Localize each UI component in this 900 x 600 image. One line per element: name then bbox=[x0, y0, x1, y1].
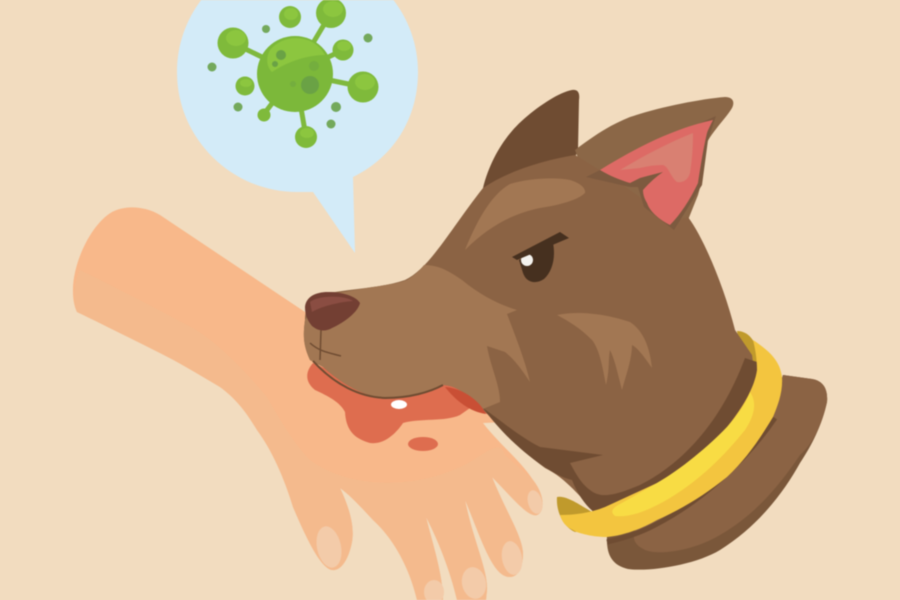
virus body bbox=[257, 36, 333, 112]
nail: index finger bbox=[424, 580, 444, 600]
ear inner outline bbox=[586, 116, 716, 230]
virus spikes bbox=[233, 13, 363, 137]
wound spot bbox=[408, 437, 438, 451]
nail: middle finger bbox=[459, 565, 489, 600]
nail: little finger bbox=[525, 489, 545, 515]
collar inside bottom bbox=[557, 497, 610, 532]
ear inner highlight bbox=[620, 133, 693, 182]
shadow under collar bbox=[607, 418, 775, 542]
far ear bbox=[483, 90, 579, 188]
virus balls bbox=[218, 0, 378, 148]
nail: ring finger bbox=[499, 540, 525, 576]
blood wound bbox=[307, 363, 490, 451]
dog bbox=[304, 90, 827, 570]
virus ball highlights bbox=[226, 1, 375, 138]
forearm lower shade bbox=[74, 270, 543, 600]
forehead light patch bbox=[465, 178, 585, 250]
eye highlight bbox=[521, 254, 533, 266]
nose bbox=[305, 292, 360, 330]
head bbox=[304, 155, 757, 515]
cheek fur bbox=[557, 313, 652, 390]
body lighter area bbox=[634, 375, 827, 552]
mouth line bbox=[313, 361, 443, 398]
near ear bbox=[575, 97, 733, 240]
collar inside top bbox=[737, 331, 759, 392]
neck and jaw shadow bbox=[483, 358, 757, 517]
whisker lines bbox=[310, 330, 341, 360]
tongue bbox=[445, 387, 486, 414]
virus craters bbox=[272, 50, 319, 94]
virus body highlight bbox=[267, 38, 325, 72]
collar highlight bbox=[612, 392, 754, 516]
muzzle light patch bbox=[304, 265, 530, 409]
arm and hand bbox=[73, 207, 560, 600]
tooth bbox=[391, 400, 407, 409]
speech bubble bbox=[177, 0, 418, 253]
ear inner pink bbox=[600, 120, 713, 225]
forearm and hand base bbox=[73, 207, 560, 600]
virus icon bbox=[208, 0, 378, 148]
eye bbox=[519, 243, 554, 282]
virus droplets bbox=[208, 25, 372, 128]
eyebrow bbox=[512, 232, 569, 260]
nose highlight bbox=[310, 297, 353, 312]
nail: thumb bbox=[313, 524, 345, 570]
collar band bbox=[560, 340, 782, 537]
dog body below collar bbox=[607, 375, 827, 570]
